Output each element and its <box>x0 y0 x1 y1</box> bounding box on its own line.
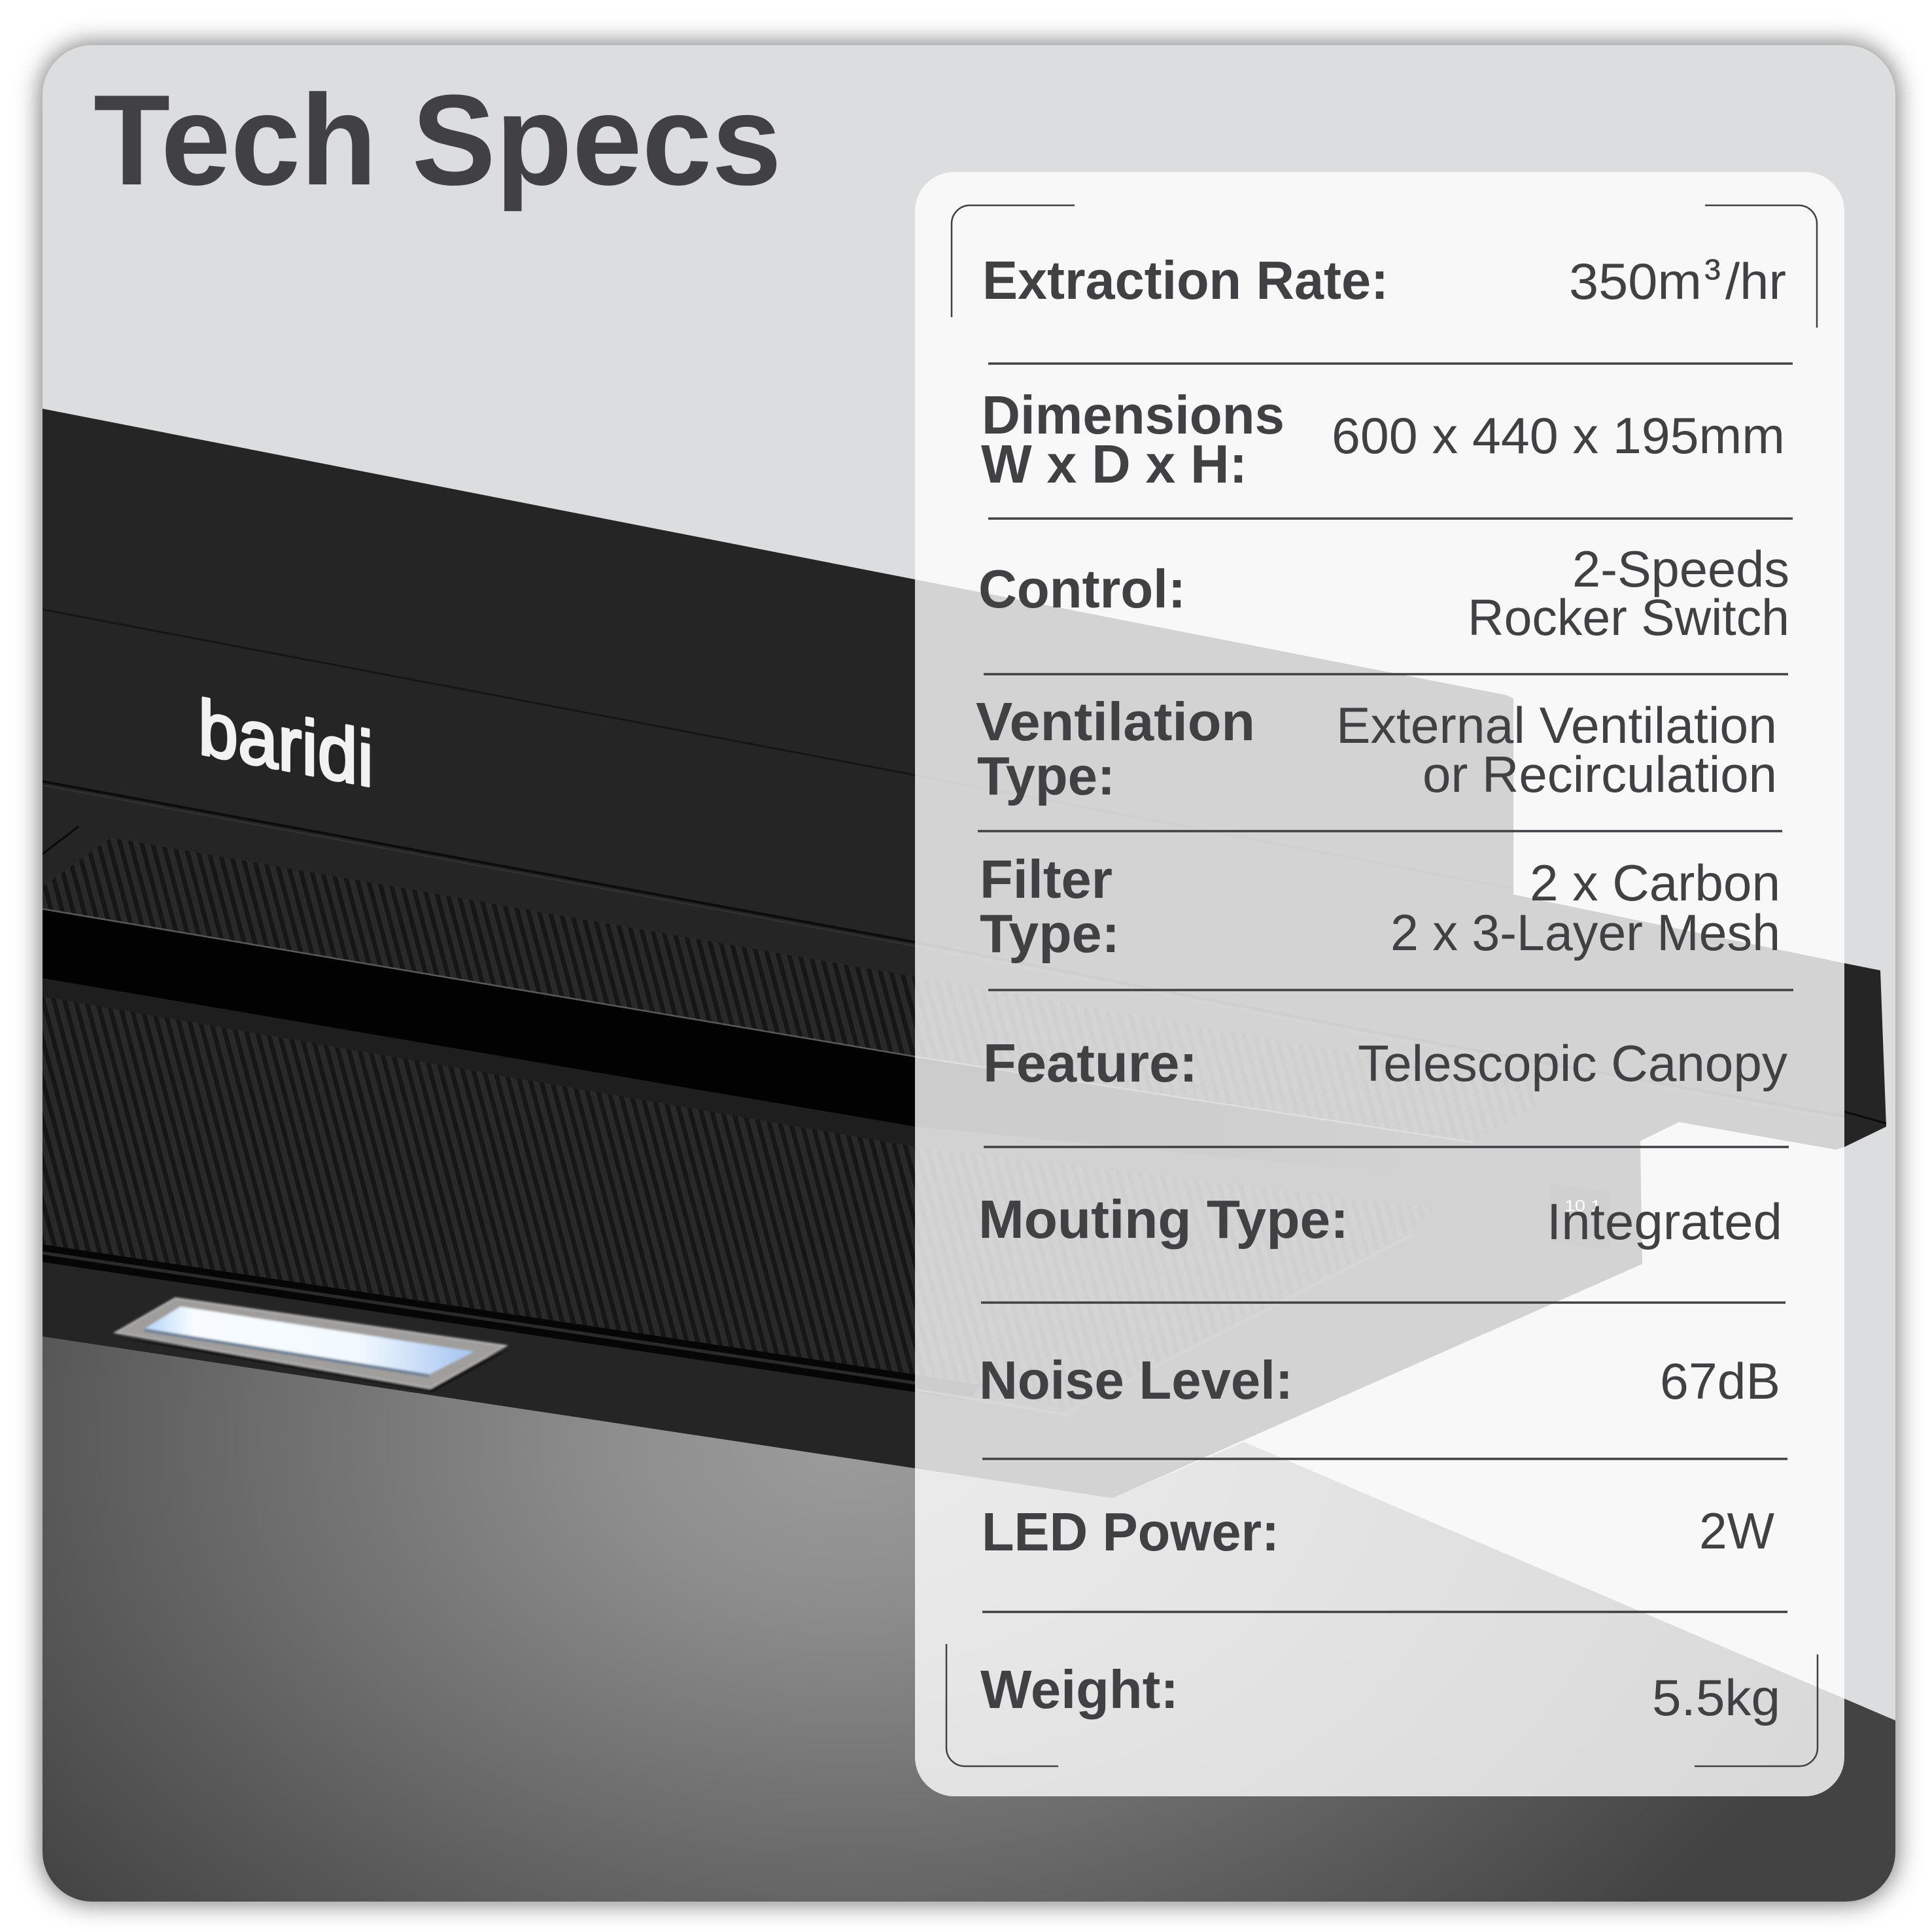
row: control: 2-Speeds <box>1572 540 1789 598</box>
brand logo: baridi <box>198 683 373 804</box>
row: weight: Weight: <box>980 1659 1179 1720</box>
row: ventilation type <box>976 691 1777 806</box>
lower mesh filter <box>43 997 915 1375</box>
panel: specifications <box>915 172 1844 1796</box>
row: noise level <box>979 1350 1780 1410</box>
row: led power <box>982 1501 1774 1562</box>
row: noise level: Noise Level: <box>979 1350 1293 1410</box>
row: feature <box>986 1044 1787 1091</box>
row: filter type: Filter <box>980 849 1113 910</box>
hood seam lines <box>43 609 1844 1120</box>
row: filter type <box>980 849 1780 964</box>
row: extraction rate: /hr <box>1725 252 1786 310</box>
panel background <box>915 172 1844 1796</box>
row: dimensions: W x D x H: <box>981 434 1247 494</box>
row: dimensions: Dimensions <box>982 384 1285 445</box>
row: feature: Telescopic Canopy <box>1358 1034 1787 1092</box>
row: weight <box>980 1659 1780 1726</box>
switch display: 10 1 <box>1564 1197 1601 1215</box>
row: filter type: 2 x Carbon <box>1530 854 1780 912</box>
dark channels below mesh <box>43 1244 915 1392</box>
band under slot <box>43 978 1432 1208</box>
hood body <box>43 409 1886 1498</box>
row: filter type: Type: <box>980 903 1120 964</box>
row: feature: Feature: <box>983 1033 1198 1093</box>
row: led power: LED Power: <box>982 1501 1279 1562</box>
row: control: Rocker Switch <box>1468 589 1789 646</box>
row: ventilation type: or Recirculation <box>1423 745 1777 803</box>
right end cap shading <box>1844 1112 1886 1123</box>
row: ventilation type: Ventilation <box>976 691 1255 752</box>
range hood product <box>43 409 1886 1498</box>
row: control <box>980 549 1788 636</box>
floor gradient <box>43 1337 1895 1902</box>
row: extraction rate: 350m <box>1569 252 1702 310</box>
title: Tech Specs <box>94 68 782 212</box>
row: extraction rate <box>986 259 1785 299</box>
row: filter type: 2 x 3-Layer Mesh <box>1390 904 1780 961</box>
row: dimensions: 600 x 440 x 195mm <box>1332 407 1785 464</box>
row: control: Control: <box>978 558 1186 619</box>
row: dimensions <box>981 394 1782 483</box>
row: ventilation type: Type: <box>977 745 1115 806</box>
led light <box>115 1298 510 1392</box>
row: noise level: 67dB <box>1660 1352 1780 1410</box>
row: extraction rate: Extraction Rate: <box>982 250 1389 311</box>
row dividers <box>978 364 1793 1612</box>
corner notch <box>43 827 78 854</box>
upper mesh filter <box>43 838 915 1055</box>
corner brackets <box>946 205 1818 1766</box>
switch housing <box>1550 1184 1610 1250</box>
row: ventilation type: External Ventilation <box>1336 696 1777 754</box>
row: mounting type: Mouting Type: <box>978 1189 1349 1250</box>
row: mounting type <box>978 1189 1782 1250</box>
row: extraction rate: ³ <box>1704 248 1721 303</box>
row: mounting type: Integrated <box>1547 1193 1782 1250</box>
black slot <box>43 910 915 1127</box>
row: led power: 2W <box>1699 1502 1774 1560</box>
row: weight: 5.5kg <box>1652 1669 1780 1726</box>
